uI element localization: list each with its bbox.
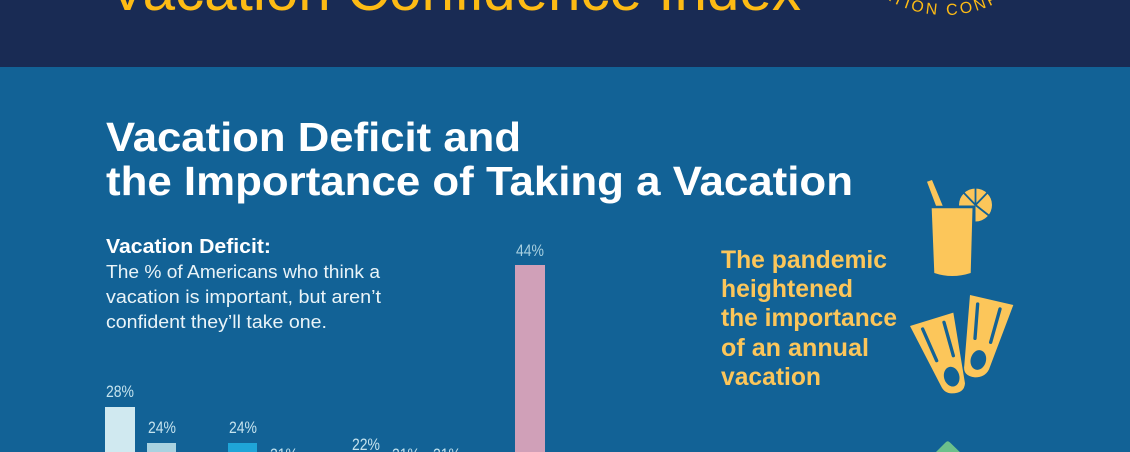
text block: vacation deficit definition: confident they’ll take one. (106, 311, 327, 332)
panel: header band (0, 0, 1130, 67)
badge: curved text (889, 0, 992, 15)
heading: Vacation Deficit and (106, 114, 521, 160)
text block: vacation deficit definition: The % of Americans who think a (106, 261, 381, 282)
bar 28% (105, 383, 135, 452)
callout: pandemic importance: vacation (721, 363, 821, 391)
icon: green diamond (930, 441, 966, 452)
heading: the Importance of Taking a Vacation (106, 158, 853, 204)
bar 24% light (147, 419, 176, 452)
bar 24% bright: 24% (229, 419, 257, 437)
bar chart (105, 242, 545, 452)
heading (106, 114, 853, 204)
callout: pandemic importance: the importance (721, 304, 897, 332)
callout: pandemic importance: heightened (721, 275, 853, 303)
text block: vacation deficit definition: vacation is important, but aren’t (106, 286, 381, 307)
bar 44%: 44% (516, 242, 544, 260)
text block: vacation deficit definition: Vacation Deficit: (106, 236, 271, 258)
text block: vacation deficit definition (106, 236, 381, 332)
callout: pandemic importance (721, 246, 897, 391)
callout: pandemic importance: of an annual (721, 334, 869, 362)
bar 24% bright (228, 419, 257, 452)
bar 28%: 28% (106, 383, 134, 401)
icon: drink with orange slice (927, 180, 992, 276)
bar 44% (515, 242, 545, 452)
bar 24% light: 24% (148, 419, 176, 437)
icon: swim fins (910, 295, 1013, 393)
callout: pandemic importance: The pandemic (721, 246, 887, 274)
